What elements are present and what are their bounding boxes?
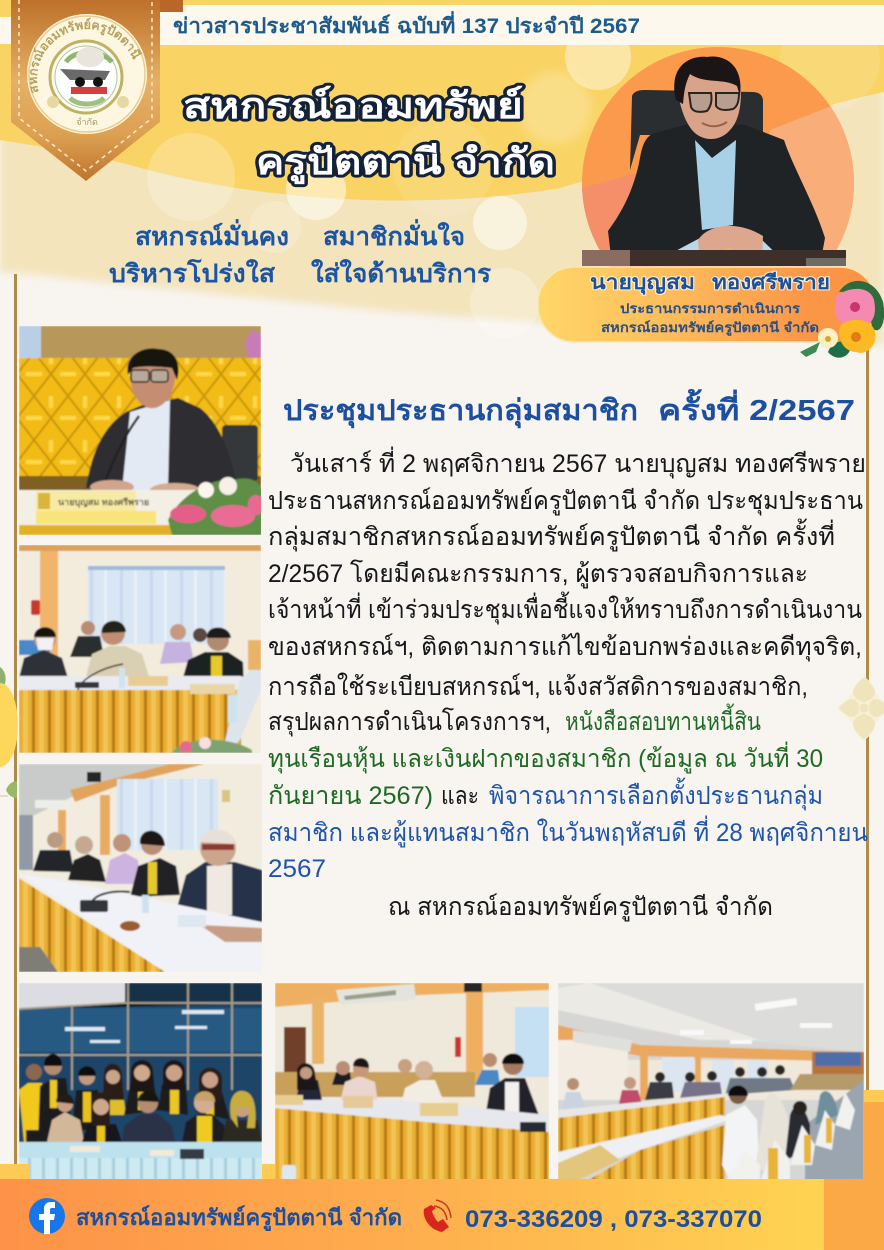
chairman portrait (582, 47, 854, 266)
photo 4: committee group portrait (19, 983, 262, 1182)
article body text (268, 446, 868, 922)
section heading: ครั้งที่ 2/2567 (658, 388, 855, 427)
chair (630, 90, 763, 170)
hands (698, 226, 763, 264)
background bokeh circles (147, 10, 880, 338)
desk (582, 250, 846, 266)
article body text: ประธานสหกรณ์ออมทรัพย์ครูปัตตานี จำกัด ประชุมประธาน (268, 487, 863, 516)
main title (183, 85, 555, 185)
ribbon badge with cooperative seal (11, 0, 183, 181)
seal: สหกรณ์ออมทรัพย์ครูปัตตานี (30, 18, 142, 93)
slogans: สมาชิกมั่นใจ (323, 219, 465, 251)
article body text: สรุปผลการดำเนินโครงการฯ, (268, 707, 551, 737)
section heading (283, 388, 855, 428)
article body text: วันเสาร์ ที่ 2 พฤศจิกายน 2567 นายบุญสม ทองศรีพราย (290, 446, 866, 479)
photo 6: wide view of the hall (558, 983, 864, 1182)
slogans (109, 219, 492, 288)
seal: จำกัด (76, 117, 98, 127)
article body text: ของสหกรณ์ฯ, ติดตามการแก้ไขข้อบกพร่องและคดีทุจริต, (268, 632, 862, 662)
footer band (0, 1090, 884, 1250)
article body text: สมาชิก และผู้แทนสมาชิก ในวันพฤหัสบดี ที่ 28 พฤศจิกายน (268, 815, 868, 848)
article body text: และ (441, 782, 479, 810)
icon: facebook (29, 1198, 65, 1234)
slogans: สหกรณ์มั่นคง (135, 219, 289, 251)
name plate: ประธานกรรมการดำเนินการ (620, 301, 800, 316)
phone numbers: 073-336209 , 073-337070 (465, 1206, 762, 1233)
article body text: 2/2567 โดยมีคณะกรรมการ, ผู้ตรวจสอบกิจการและ (268, 559, 808, 589)
facebook page name: สหกรณ์ออมทรัพย์ครูปัตตานี จำกัด (76, 1205, 402, 1232)
header strip: newsletter issue: ข่าวสารประชาสัมพันธ์ ฉบับที่ 137 ประจำปี 2567 (173, 10, 640, 38)
photo 1: chairman at microphone: นายบุญสม ทองศรีพราย (58, 497, 149, 508)
main title: ครูปัตตานี จำกัด (256, 141, 555, 185)
article body text: หนังสือสอบทานหนี้สิน (565, 703, 761, 736)
article body text: การถือใช้ระเบียบสหกรณ์ฯ, แจ้งสวัสดิการของสมาชิก, (268, 672, 808, 701)
photo 2: meeting room front row (19, 545, 261, 755)
ornament: gold diamond flower (838, 677, 884, 740)
article body text: พิจารณาการเลือกตั้งประธานกลุ่ม (489, 777, 823, 811)
body (608, 122, 825, 265)
name plate: นายบุญสม (590, 272, 695, 295)
main title: สหกรณ์ออมทรัพย์ (183, 85, 523, 126)
slogans: ใส่ใจด้านบริการ (311, 258, 492, 288)
icon: phone (424, 1200, 451, 1232)
article body text: ณ สหกรณ์ออมทรัพย์ครูปัตตานี จำกัด (388, 893, 773, 922)
article body text: 2567 (268, 855, 326, 883)
section heading: ประชุมประธานกลุ่มสมาชิก (283, 395, 638, 428)
slogans: บริหารโปร่งใส (109, 258, 276, 288)
article body text: กันยายน 2567) (268, 782, 433, 810)
photo 1: chairman at microphone (19, 326, 264, 535)
photo 5: members at yellow-skirted table (275, 983, 549, 1183)
tropical flowers (800, 281, 884, 358)
seal (27, 14, 147, 134)
decorative side flowers (0, 667, 18, 798)
name plate: ทองศรีพราย (712, 271, 830, 294)
article body text: ทุนเรือนหุ้น และเงินฝากของสมาชิก (ข้อมูล ณ วันที่ 30 (268, 741, 823, 774)
photo 3: long table with members (19, 764, 262, 972)
name plate: สหกรณ์ออมทรัพย์ครูปัตตานี จำกัด (601, 320, 819, 336)
head (677, 60, 741, 139)
frame lines (14, 274, 869, 1164)
article body text: กลุ่มสมาชิกสหกรณ์ออมทรัพย์ครูปัตตานี จำกัด ครั้งที่ (268, 518, 835, 552)
header strip: newsletter issue (0, 0, 884, 45)
name plate (538, 267, 876, 342)
